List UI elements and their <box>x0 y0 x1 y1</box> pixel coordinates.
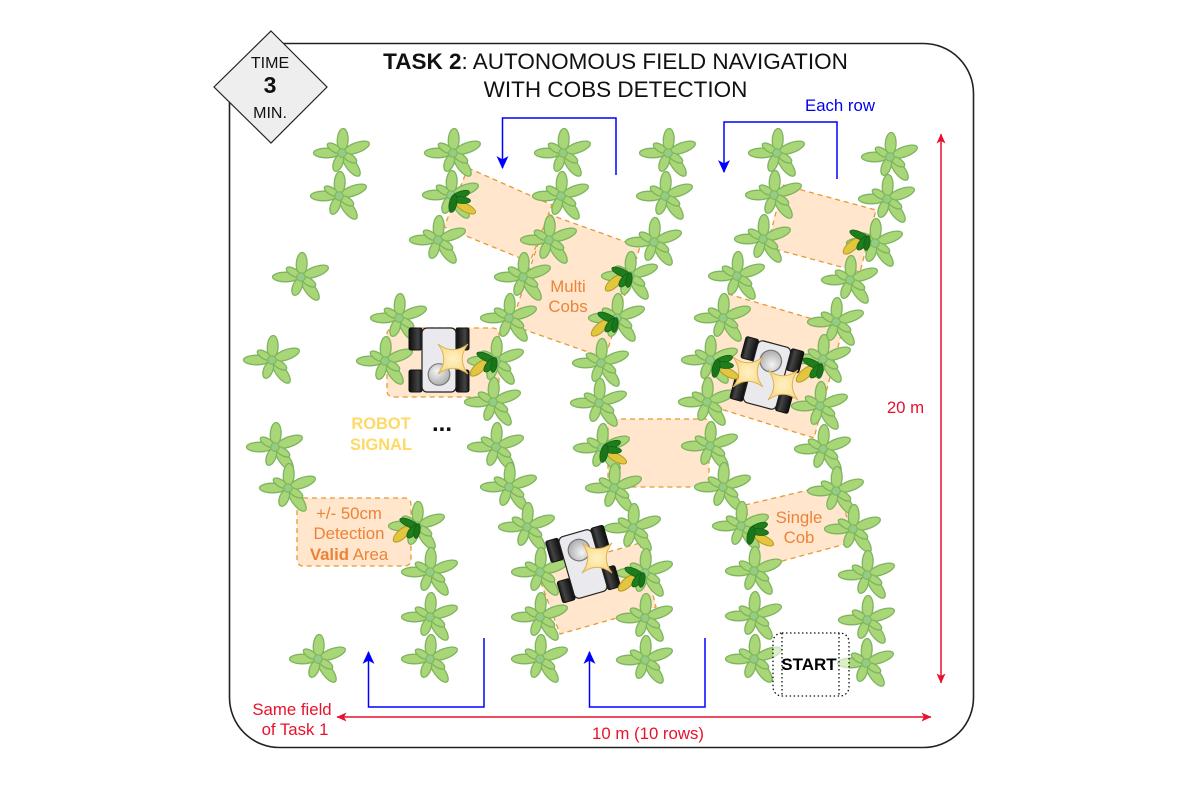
area: legend valid <box>297 498 411 566</box>
title: WITH COBS DETECTION <box>484 77 747 102</box>
start box: START <box>781 655 837 674</box>
label: valid area: Valid Area <box>310 545 389 564</box>
label: single cob: Cob <box>784 528 814 547</box>
robot: bottom tilted <box>545 525 621 603</box>
detection valid areas <box>297 168 876 634</box>
label: robot signal: SIGNAL <box>350 436 412 454</box>
label: single cob: Single <box>776 508 822 527</box>
label: multi cobs <box>548 277 588 316</box>
red arrow: 20 m <box>940 134 942 683</box>
robot: left <box>409 328 469 392</box>
start box <box>773 633 849 696</box>
area: multi cobs <box>511 214 640 358</box>
ellipsis: ... <box>432 410 452 437</box>
area: large with robot <box>698 294 843 438</box>
corn cobs <box>391 188 871 594</box>
label: 20 m: 20 m <box>887 398 924 417</box>
robot: right tilted <box>730 336 804 414</box>
blue arrow: bottom left <box>368 638 484 707</box>
blue arrow: bottom center <box>590 638 705 707</box>
area: robot left <box>387 328 499 397</box>
blue arrow: top right <box>724 122 837 179</box>
label: same field: of Task 1 <box>262 720 328 739</box>
label: multi cobs: Cobs <box>548 297 588 316</box>
area: top left row <box>444 168 552 262</box>
area: single cob <box>745 483 853 567</box>
label: valid area: Detection <box>314 524 384 543</box>
title: TASK 2: AUTONOMOUS FIELD NAVIGATION <box>383 49 848 74</box>
label: robot signal: ROBOT <box>351 415 411 433</box>
label: robot signal <box>350 415 412 454</box>
label: multi cobs: Multi <box>550 277 586 296</box>
area: top right row <box>767 185 876 272</box>
area: center <box>608 419 709 487</box>
blue arrow: top center <box>502 118 616 175</box>
label: same field: Same field <box>252 700 332 719</box>
label: valid area <box>310 504 389 564</box>
label: valid area: +/- 50cm <box>316 504 382 523</box>
time diamond: MIN. <box>253 105 287 122</box>
plants <box>244 128 919 689</box>
label: single cob <box>776 508 822 547</box>
each row label: Each row <box>805 96 876 115</box>
time diamond <box>214 31 327 143</box>
time diamond: TIME <box>251 55 289 72</box>
area: bottom robot <box>537 543 656 634</box>
robot signal star <box>438 344 468 374</box>
time diamond: 3 <box>264 72 276 98</box>
label: 10 m: 10 m (10 rows) <box>592 724 704 743</box>
label: same field <box>252 700 332 739</box>
title <box>383 49 848 102</box>
red arrow: 10 m <box>337 716 931 718</box>
outer frame <box>230 44 974 748</box>
